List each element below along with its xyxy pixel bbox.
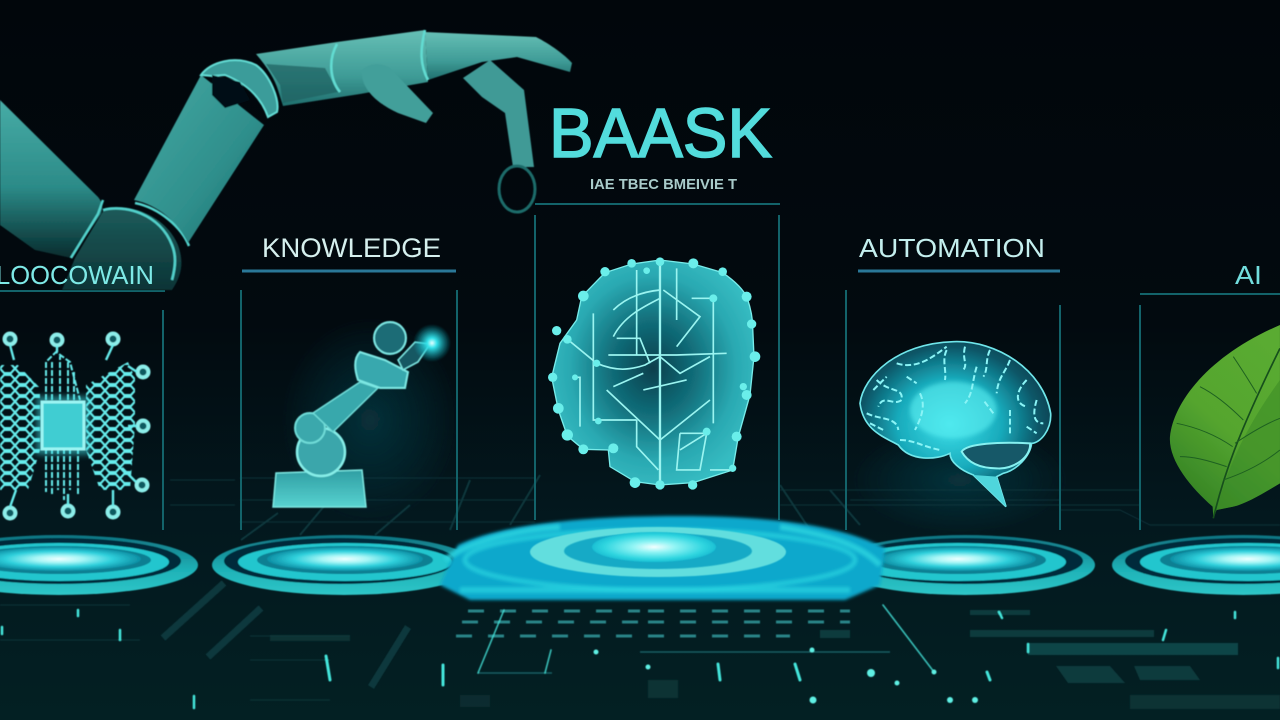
central core: [592, 532, 716, 562]
leaf veins: [1177, 348, 1280, 518]
platform: knowledge disk: [212, 535, 476, 595]
label: ai: AI: [1235, 260, 1262, 290]
arm: second finger: [463, 60, 534, 167]
label: knowledge: KNOWLEDGE: [262, 233, 441, 263]
chip vertical traces: [46, 352, 80, 500]
leaf shadow: [1217, 380, 1280, 510]
brain cerebellum: [962, 443, 1030, 468]
platform: ai disk: [1112, 535, 1280, 595]
robot shoulder: [295, 413, 325, 443]
chip glow: [36, 396, 90, 455]
arm: dark palm shade: [266, 64, 338, 103]
arm: index finger: [425, 32, 572, 80]
icon: central neural head: [548, 257, 760, 490]
brain glow center: [910, 382, 997, 438]
title: BAASK: [549, 94, 772, 172]
arm: wrist joint: [201, 60, 278, 117]
icon: green leaf: [1170, 325, 1280, 518]
central light bands: [445, 527, 880, 590]
icon: circuit chip: [0, 334, 148, 518]
robot body ball: [297, 428, 345, 476]
panel: automation frame: [846, 271, 1060, 530]
robot head joint: [355, 352, 408, 388]
icon: robot arm: [273, 322, 451, 507]
robotic arm: [0, 30, 572, 290]
icon: glowing brain: [860, 342, 1051, 507]
panel: center frame: [535, 204, 780, 520]
arm: palm: [256, 30, 428, 106]
arm: claw ring: [499, 166, 535, 212]
brain outline: [860, 342, 1051, 507]
robot link: [313, 382, 378, 432]
head body: [552, 260, 754, 485]
arm: elbow: [62, 207, 181, 290]
head nodes: [548, 257, 760, 490]
circuit floor: [0, 315, 1280, 709]
panel: blockchain frame: [0, 291, 165, 530]
platform: automation disk: [835, 535, 1095, 595]
robot upper ball: [374, 322, 406, 354]
arm: thumb: [362, 64, 433, 123]
arm: forearm: [134, 75, 264, 243]
robot glow: [413, 324, 451, 362]
brain stem: [973, 475, 1006, 507]
chip nodes: [4, 334, 148, 518]
panel: ai frame: [1140, 294, 1280, 530]
brain folds: [867, 347, 1043, 450]
central glow: [440, 516, 885, 600]
panel: knowledge frame: [241, 271, 457, 530]
platform: central disk: [440, 516, 885, 600]
platform: blockchain disk: [0, 535, 198, 595]
central ring: [530, 527, 786, 577]
robot gripper: [398, 342, 430, 370]
arm: elbow rims: [71, 200, 189, 280]
label: automation: AUTOMATION: [859, 233, 1045, 263]
chip wings: [0, 362, 135, 490]
chip core: [42, 402, 84, 449]
arm: upper segment: [0, 100, 102, 258]
arm: dark socket: [212, 75, 250, 108]
robot base: [273, 470, 366, 507]
head circuit lines: [568, 262, 733, 483]
subtitle: IAE TBEC BMEIVIE T: [590, 176, 737, 193]
label: blockchain: LOOCOWAIN: [0, 260, 154, 290]
leaf blade: [1170, 325, 1280, 518]
